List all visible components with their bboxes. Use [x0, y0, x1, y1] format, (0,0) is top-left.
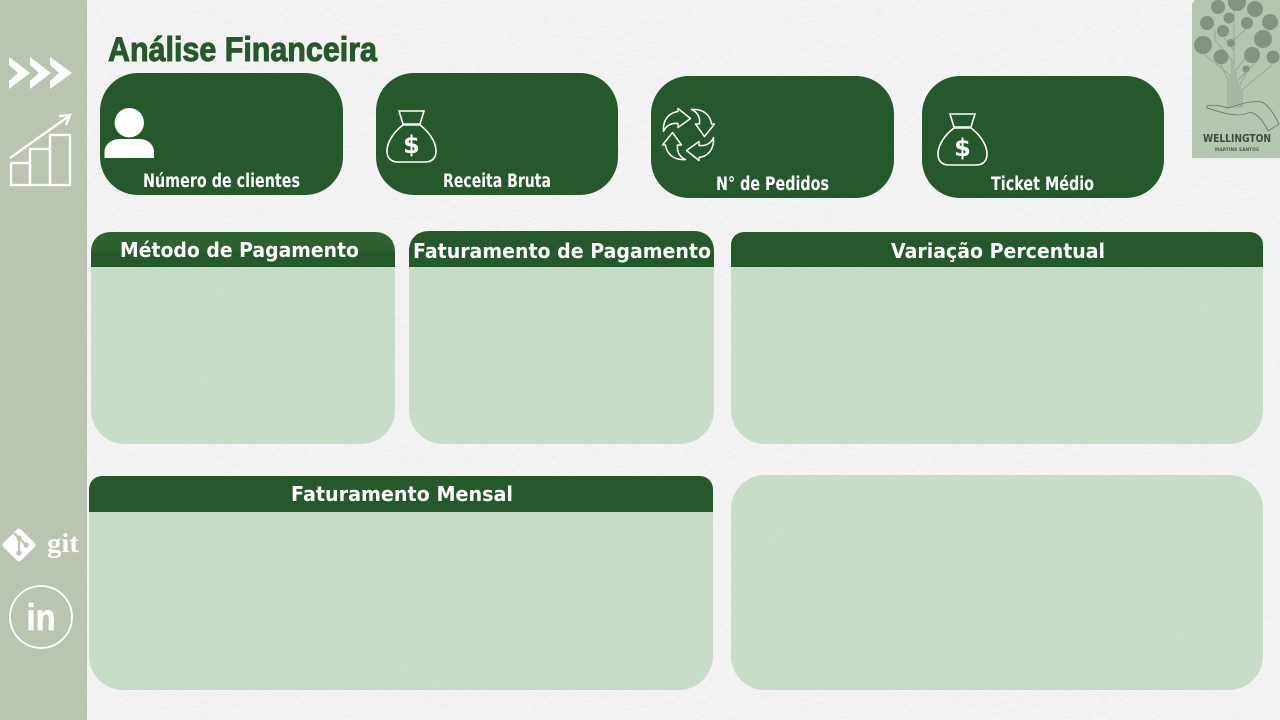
- label: ticket médio: Ticket Médio: [991, 174, 1094, 195]
- sidebar: [0, 0, 87, 720]
- icon: money bag: $: [954, 134, 971, 162]
- header: faturamento de pagamento: [409, 231, 714, 267]
- header: faturamento mensal: Faturamento Mensal: [291, 482, 513, 506]
- header: faturamento de pagamento: Faturamento de Pagamento: [413, 239, 711, 263]
- header: variação percentual: Variação Percentual: [891, 239, 1105, 263]
- label: nº de pedidos: N° de Pedidos: [716, 174, 829, 195]
- header: variação percentual: [731, 232, 1263, 267]
- panel: variação percentual body: [731, 232, 1263, 444]
- card: nº de pedidos: [651, 76, 894, 198]
- logo: wellington martins santos: [1192, 0, 1280, 158]
- panel: método de pagamento body: [91, 232, 395, 444]
- icon: money bag: [938, 114, 987, 165]
- icon: money bag: $: [403, 131, 420, 159]
- header: método de pagamento: [91, 232, 395, 267]
- panel: empty chart area: [731, 475, 1263, 690]
- card: receita bruta: [376, 73, 618, 195]
- card: ticket médio: [922, 76, 1164, 198]
- icon: git logo: [1, 527, 79, 563]
- title: Análise Financeira: [108, 31, 378, 69]
- icon: linkedin: in: [26, 597, 56, 638]
- icon: chevrons: [9, 57, 72, 89]
- logo subtitle: MARTINS SANTOS: [1215, 147, 1259, 152]
- icon: linkedin: [10, 586, 72, 648]
- label: número de clientes: Número de clientes: [143, 171, 300, 192]
- logo name: WELLINGTON: [1203, 133, 1271, 145]
- icon: money bag: [387, 111, 436, 162]
- label: receita bruta: Receita Bruta: [443, 171, 551, 192]
- icon: git logo: git: [47, 528, 79, 558]
- card: número de clientes: [100, 73, 343, 195]
- icon: cycle arrows: [662, 108, 714, 160]
- icon: user: [104, 108, 154, 158]
- icon: growth chart: [10, 115, 70, 185]
- header: método de pagamento: Método de Pagamento: [120, 238, 359, 262]
- panel: faturamento mensal body: [89, 476, 713, 690]
- header: faturamento mensal: [89, 476, 713, 512]
- panel: faturamento de pagamento body: [409, 232, 714, 444]
